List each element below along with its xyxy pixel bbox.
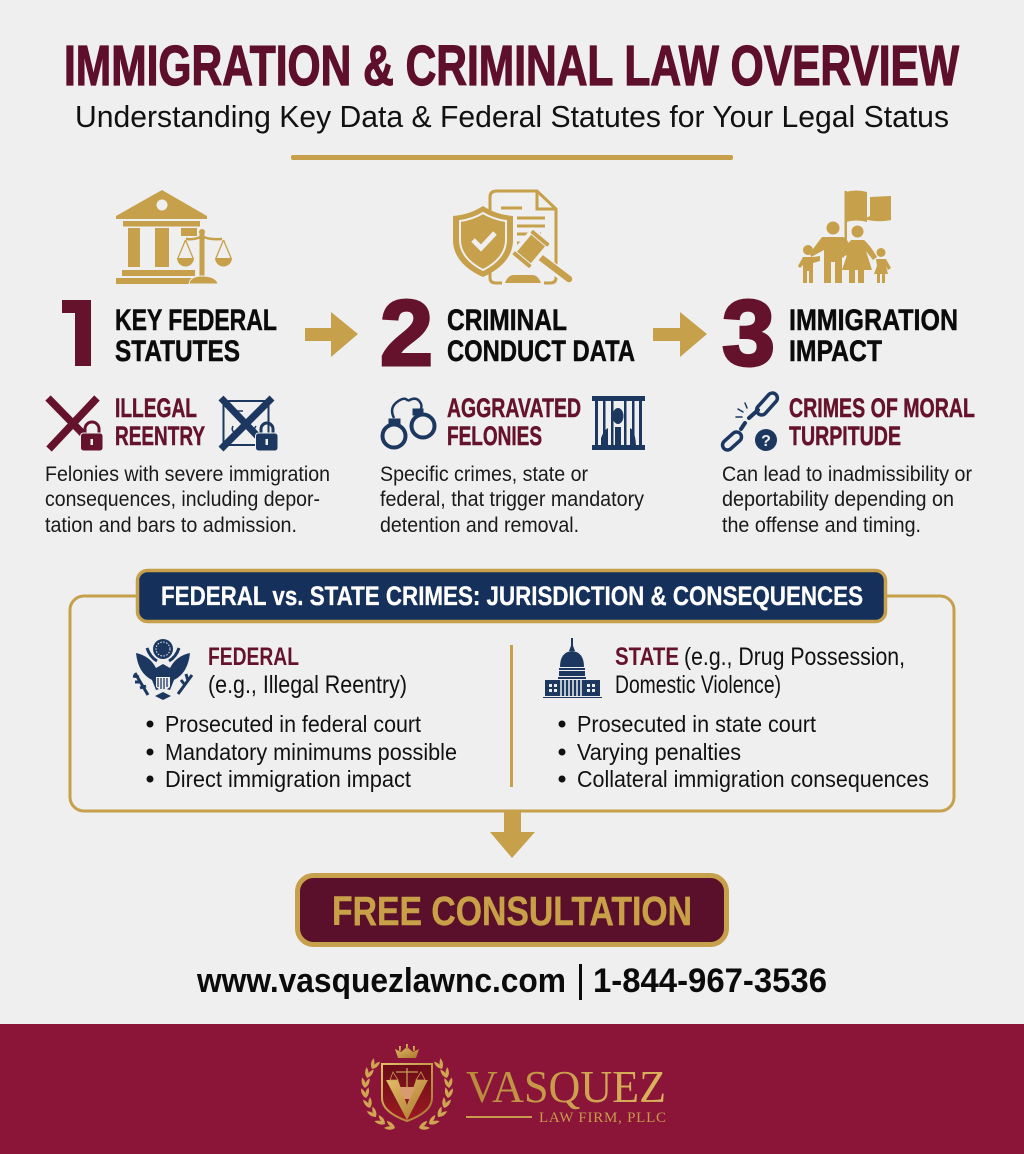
subheading [115,393,205,451]
subheading [447,393,581,451]
laurel left [359,1058,396,1130]
icon: state capitol [543,638,602,698]
federal bullet list [146,711,457,792]
subtitle: Understanding Key Data & Federal Statutes for Your Legal Status [75,99,949,134]
laurel right [418,1058,455,1130]
heading: IMPACT [789,335,882,368]
banner heading [138,570,886,622]
icon: federal eagle seal [133,639,192,700]
icon: broken chain with question mark: ? [761,433,771,450]
subheading: AGGRAVATED [447,393,581,423]
description: consequences, including depor- [45,488,320,511]
panel: key federal statutes [45,190,330,537]
icon: courthouse and scales [116,190,232,284]
description: deportability depending on [722,488,954,511]
federal bullet list: Mandatory minimums possible [165,739,457,765]
state bullet list: Collateral immigration consequences [577,766,929,792]
icon: shield, document and gavel [453,191,569,283]
description: Felonies with severe immigration [45,463,330,486]
call to action button [298,876,726,944]
arrow: down to consultation [490,812,535,858]
heading: CRIMINAL [447,304,567,337]
arrow: step 2 to 3 [653,312,707,357]
logo wordmark: LAW FIRM, PLLC [539,1110,666,1126]
description: the offense and timing. [722,514,921,537]
number 1 [62,300,91,366]
description: Can lead to inadmissibility or [722,463,972,486]
shield [382,1064,432,1121]
logo emblem [359,1044,455,1130]
subheading [789,393,975,451]
arrow: step 1 to 2 [305,312,358,357]
banner heading: FEDERAL vs. STATE CRIMES: JURISDICTION & CONSEQUENCES [161,581,863,611]
heading [789,304,958,368]
icon: family with flag [798,190,891,283]
federal heading: (e.g., Illegal Reentry) [208,671,407,699]
heading: STATUTES [115,335,240,368]
number 3: 3 [722,281,775,385]
heading [447,304,635,368]
logo wordmark: VASQUEZ [466,1062,666,1112]
description [380,463,644,537]
state heading [615,643,905,699]
icon: red X with lock [48,398,103,451]
federal bullet list: Prosecuted in federal court [165,711,421,737]
subheading: TURPITUDE [789,421,901,451]
heading: KEY FEDERAL [115,304,277,337]
state heading: Domestic Violence) [615,671,781,699]
description [45,463,330,537]
state bullet list: Prosecuted in state court [577,711,816,737]
contact line: 1-844-967-3536 [593,962,827,1000]
crown [395,1044,419,1058]
description [722,463,972,537]
federal heading: FEDERAL [208,643,299,671]
call to action button: FREE CONSULTATION [332,888,692,934]
description: Specific crimes, state or [380,463,588,486]
icon: handcuffs [382,399,434,448]
state heading: STATE [615,643,679,671]
subheading: REENTRY [115,421,205,451]
state heading: (e.g., Drug Possession, [684,643,905,671]
contact line: www.vasquezlawnc.com [196,962,566,1000]
icon: jail bars [592,396,645,450]
subheading: ILLEGAL [115,393,197,423]
icon: blue crossed document with lock [221,398,278,451]
heading: CONDUCT DATA [447,335,635,368]
icon: broken chain with question mark [720,391,779,452]
heading: IMMIGRATION [789,304,958,337]
federal heading [208,643,407,699]
federal bullet list: Direct immigration impact [165,766,411,792]
description: tation and bars to admission. [45,514,297,537]
description: federal, that trigger mandatory [380,488,644,511]
number 2: 2 [380,281,433,385]
number 1: 1 [58,282,96,386]
subheading: FELONIES [447,421,542,451]
panel: immigration impact [720,190,975,537]
state bullet list: Varying penalties [577,739,741,765]
description: detention and removal. [380,514,579,537]
heading [115,304,277,368]
panel: criminal conduct data [380,191,645,537]
footer band [0,1024,1024,1154]
state bullet list [558,711,929,792]
contact line [196,962,827,1000]
panel: federal vs state [70,570,954,811]
